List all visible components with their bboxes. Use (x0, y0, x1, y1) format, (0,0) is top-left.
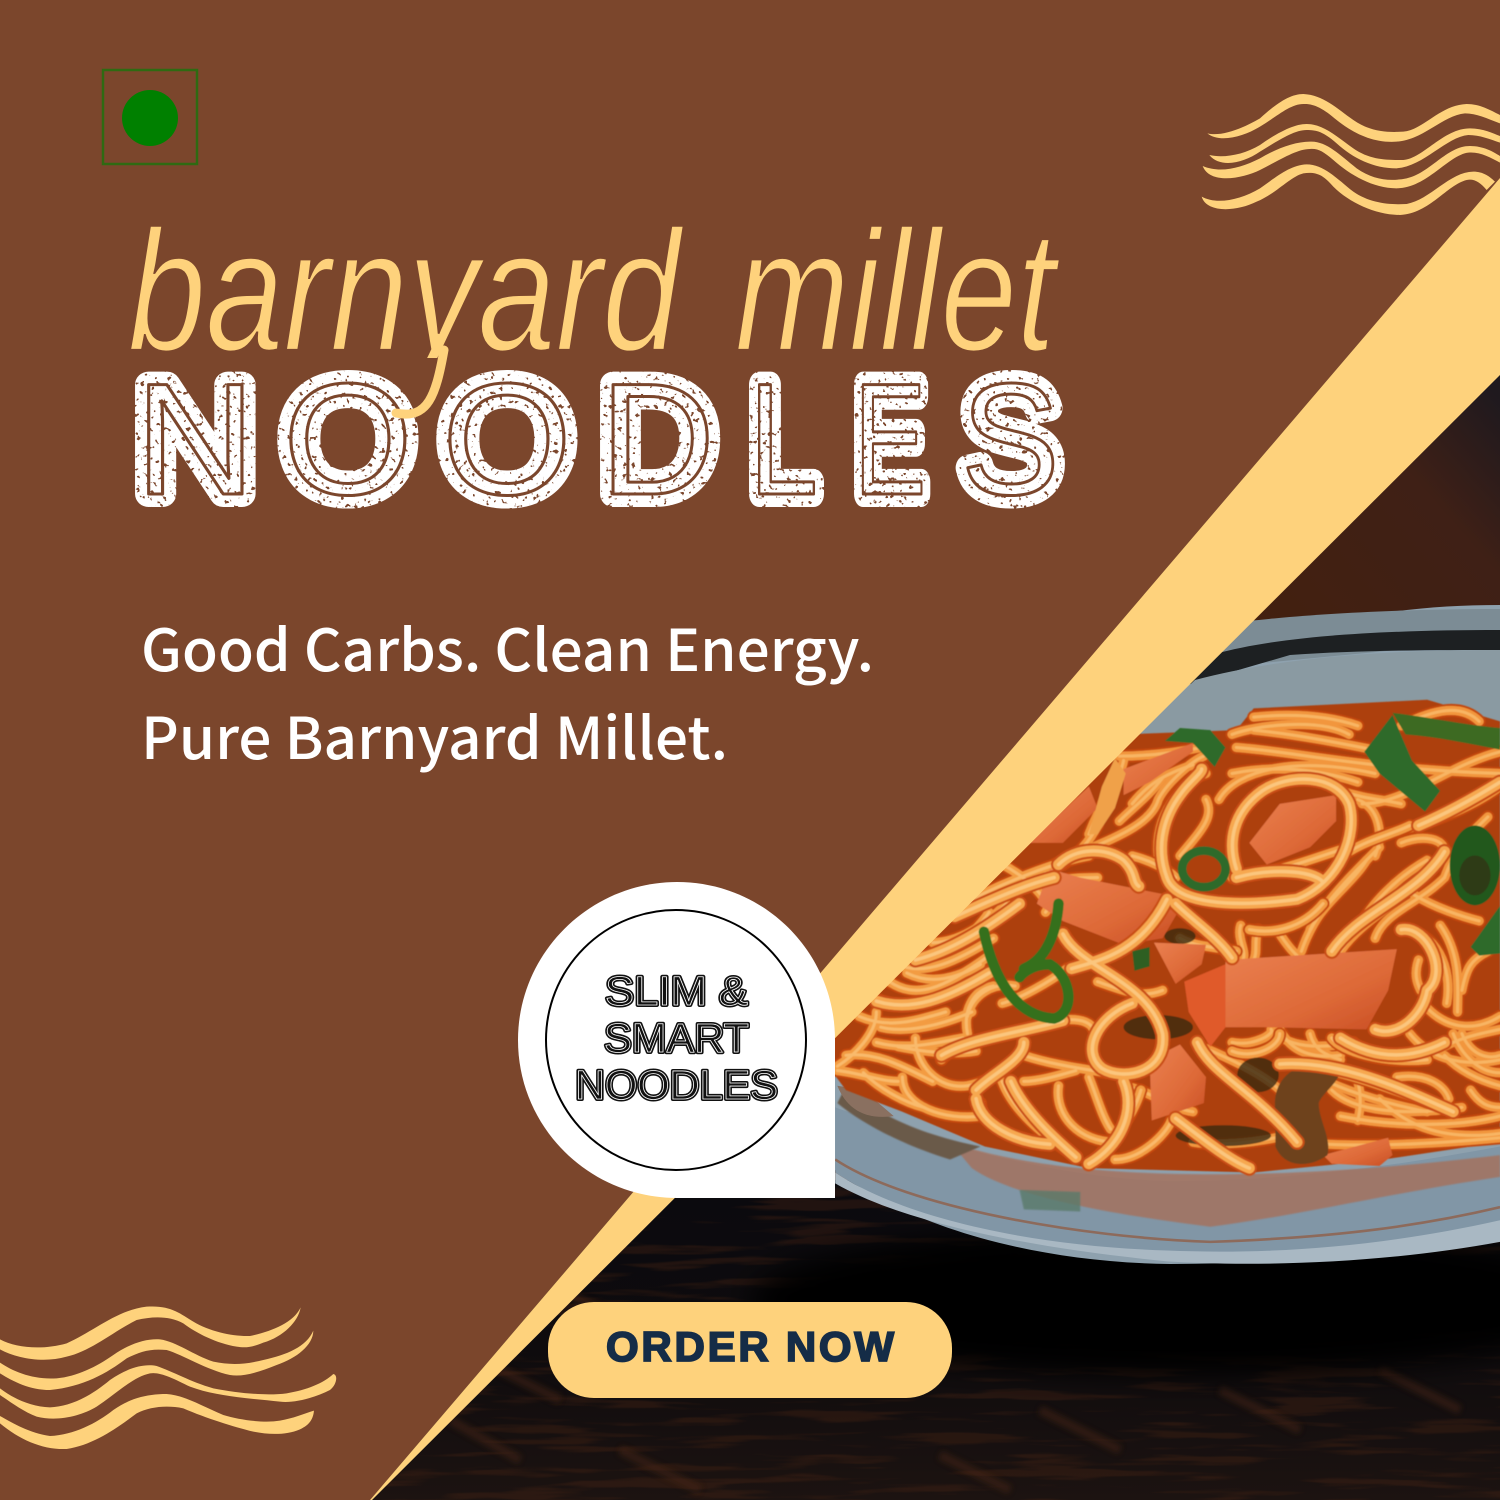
badge lettering: SLIM & (605, 968, 748, 1014)
table bottom wood (340, 1180, 1500, 1500)
inline contour of letters: O (442, 350, 572, 528)
tagline: Pure Barnyard Millet. (141, 692, 728, 776)
white letter bodies: S (961, 350, 1060, 528)
white letter bodies: O (283, 350, 413, 528)
noodle layer front (876, 769, 1500, 1168)
white letter bodies: L (749, 351, 818, 529)
badge: slim and smart noodles (518, 882, 835, 1198)
call to action button: ORDER NOW (606, 1323, 894, 1370)
onion slices (1089, 758, 1339, 1164)
tagline: Good Carbs. Clean Energy. (141, 604, 874, 688)
yellow diagonal band (370, 178, 1500, 1500)
plate (835, 605, 1500, 1264)
decorative noodle waves top right (1202, 94, 1500, 215)
food mass (820, 700, 1500, 1172)
table top wood (700, 340, 1500, 640)
white letter bodies (135, 350, 1060, 529)
lower plate surface (835, 1086, 1500, 1264)
white letter bodies: N (135, 350, 256, 528)
inline contour of letters: E (854, 350, 926, 528)
inline contour of letters: N (135, 350, 256, 528)
ham pieces (1028, 743, 1397, 1166)
swash of letter y (396, 350, 444, 414)
badge lettering: SMART (604, 1015, 749, 1061)
veg mark icon (103, 70, 197, 164)
noodle layer back (837, 710, 1500, 1168)
white letter bodies: E (854, 350, 926, 528)
inline contour of letters: S (961, 350, 1060, 528)
heading: barnyard millet: barnyard (128, 195, 684, 387)
inline contour of letters: D (600, 350, 715, 528)
heading: barnyard millet (131, 226, 1059, 358)
white letter bodies: O (442, 350, 572, 528)
badge lettering (575, 968, 778, 1108)
heading: barnyard millet: millet (735, 195, 1060, 387)
badge lettering: NOODLES (575, 1062, 778, 1108)
call to action button (548, 1302, 952, 1398)
white letter bodies: D (600, 350, 715, 528)
inline contour of letters (135, 350, 1060, 529)
decorative noodle waves bottom left (0, 1306, 336, 1449)
green peppers (984, 713, 1500, 1019)
inline contour of letters: O (283, 350, 413, 528)
tagline (141, 604, 874, 776)
badge lettering: SMART (604, 1015, 749, 1061)
inline contour of letters: L (749, 351, 818, 529)
food and plate details, in zoomed coordinates (820, 700, 1500, 1264)
heading: NOODLES (135, 350, 1060, 529)
badge lettering: NOODLES (575, 1062, 778, 1108)
dark gaps under noodles (1124, 928, 1279, 1146)
background photo: noodle plate on dark wood (340, 340, 1500, 1500)
badge lettering: SLIM & (605, 968, 748, 1014)
